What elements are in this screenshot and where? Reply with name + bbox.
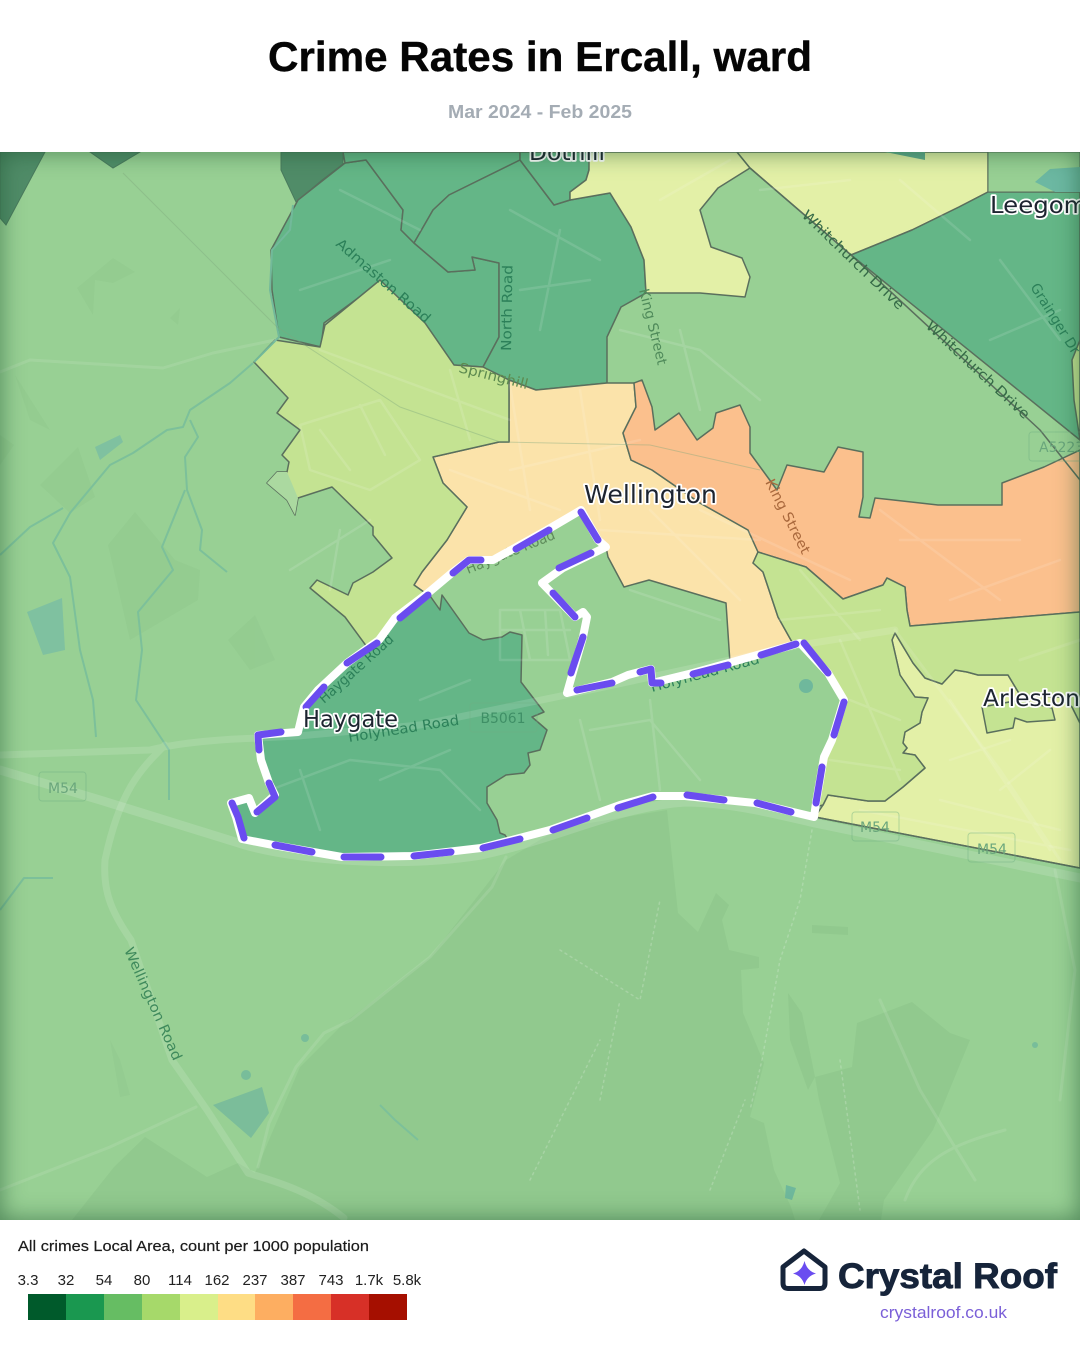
shield: M54 east one: M54 — [860, 820, 890, 836]
ward boundary: Ercall — [231, 510, 844, 857]
legend tick labels: 3.3 — [18, 1272, 38, 1289]
ward: pale yellow north-east — [737, 152, 988, 255]
legend colour bar — [28, 1294, 407, 1320]
shield: M54 east two — [968, 833, 1015, 862]
town streets — [270, 160, 1070, 850]
legend tick labels: 162 — [204, 1272, 230, 1289]
ponds — [95, 435, 123, 460]
legend tick labels: 114 — [168, 1272, 192, 1289]
Holyhead road and interchange — [0, 630, 895, 1218]
choropleth map — [0, 152, 1080, 1220]
M54 boundary line — [815, 817, 1080, 868]
legend tick labels — [18, 1272, 422, 1289]
logo: Crystal Roof — [783, 1251, 1057, 1322]
legend tick labels: 1.7k — [355, 1272, 384, 1289]
road labels: Wellington Road — [120, 945, 185, 1063]
dotted footpaths — [530, 830, 860, 1210]
road labels: Holyhead Road — [649, 651, 761, 696]
road labels — [120, 207, 1080, 1063]
icon: house with star — [783, 1251, 825, 1288]
shield: M54 east one — [852, 812, 899, 841]
ward: Leegomery dark green — [851, 192, 1080, 440]
woodland patches — [0, 258, 970, 1220]
water features — [0, 152, 1080, 1200]
legend tick labels: 237 — [242, 1272, 268, 1289]
title: Crime Rates in Ercall, ward — [268, 33, 812, 80]
secondary roads — [0, 340, 1080, 1200]
legend tick labels: 32 — [58, 1272, 74, 1289]
road labels: Haygate Road — [316, 632, 397, 707]
ward: pale yellow north — [570, 152, 750, 297]
railway line — [123, 173, 760, 470]
streams — [0, 205, 418, 1140]
shield: B5061: B5061 — [480, 711, 526, 727]
ward: small pond parcel — [267, 472, 298, 515]
shield: M54 west — [39, 772, 86, 801]
purple dashes — [232, 512, 844, 857]
road labels: Whitchurch Drive — [922, 318, 1033, 423]
road labels: Admaston Road — [332, 236, 433, 327]
ward: small east edge — [1072, 340, 1080, 440]
shield: A5223 — [1029, 432, 1080, 461]
place labels: Haygate — [303, 707, 398, 733]
legend — [18, 1238, 422, 1320]
road labels: Haygate Road — [464, 527, 558, 578]
ward: North Road dark green — [414, 160, 646, 390]
ward: Wellington cream — [414, 380, 792, 663]
ward: pale green east — [753, 552, 1080, 807]
footer with legend and logo — [18, 1238, 1058, 1322]
legend tick labels: 743 — [318, 1272, 344, 1289]
road labels: King Street — [761, 477, 813, 557]
legend tick labels: 5.8k — [393, 1272, 422, 1289]
M54 motorway — [0, 770, 1080, 878]
road labels: Holyhead Road — [347, 713, 460, 746]
road labels: North Road — [499, 265, 517, 351]
map edge vignette — [0, 152, 1080, 1220]
road labels: Whitchurch Drive — [798, 207, 907, 313]
ward: Admaston dark green — [271, 160, 499, 367]
road labels: King Street — [635, 287, 670, 367]
road network — [0, 160, 1080, 1218]
ward: Arleston enclave — [982, 700, 1055, 733]
shield: M54 west: M54 — [48, 781, 78, 797]
ward: Dothill dark green — [520, 152, 590, 205]
place labels: Wellington — [584, 480, 717, 509]
ward: upper centre dark green — [343, 152, 520, 243]
ward: pale green west — [254, 280, 509, 647]
road labels: Springhill — [457, 360, 530, 393]
place labels — [303, 140, 1080, 733]
title and date header — [268, 33, 812, 122]
legend tick labels: 80 — [134, 1272, 150, 1289]
ward: pale yellow Arleston — [815, 633, 1080, 868]
top right lake area — [988, 152, 1080, 192]
legend title: All crimes Local Area, count per 1000 population — [18, 1238, 369, 1255]
whitchurch boundary line — [750, 168, 1080, 480]
shield: M54 east two: M54 — [977, 842, 1007, 858]
legend tick labels: 54 — [96, 1272, 112, 1289]
white outline — [231, 510, 844, 857]
place labels: Arleston — [983, 686, 1080, 712]
road shields — [39, 432, 1080, 862]
legend tick labels: 387 — [280, 1272, 306, 1289]
date range subtitle: Mar 2024 - Feb 2025 — [448, 102, 632, 122]
shield: B5061 — [470, 703, 537, 732]
logo wordmark: Crystal Roof — [838, 1257, 1057, 1296]
region: neighbourhood wards — [231, 152, 1080, 868]
ward: Haygate dark green — [231, 593, 547, 857]
ward: orange high crime — [623, 380, 1080, 626]
region: top-left dark wards — [0, 152, 343, 225]
website: crystalroof.co.uk — [880, 1304, 1008, 1322]
